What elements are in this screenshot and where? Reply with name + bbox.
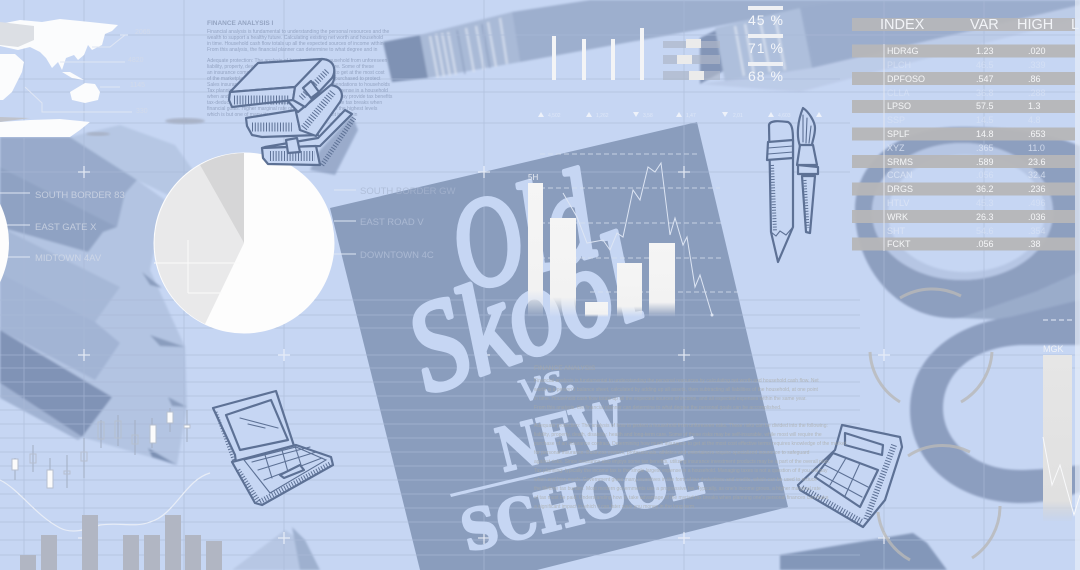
data table: LPSO: [887, 101, 911, 111]
candlestick chart: [12, 408, 190, 488]
photo: pencil top: [383, 0, 1080, 92]
percent stats: 71 %: [748, 40, 784, 56]
data table: [852, 17, 1080, 251]
bar chart bottom: [20, 515, 222, 570]
data table: HIGH: [1017, 17, 1053, 33]
data table: DRGS: [887, 184, 913, 194]
data table: 26.3: [976, 212, 994, 222]
ticker row: [538, 112, 822, 119]
heading: Old Skool vs New School lettering: NEW: [490, 387, 634, 487]
stacked horizontal bars: [663, 39, 720, 80]
percent stats: 68 %: [748, 68, 784, 84]
text block: finance analysis top: when and how the family can reduce taxes through tax law may provide tax benefits: [207, 94, 393, 100]
text block: finance analysis top: Sales insurance agents may make some of these recommendations to households: [207, 82, 390, 88]
bar chart center: 5H: [528, 173, 538, 182]
text block: finance analysis top: of the marketplace and insurance products, which can be purchased to protect: [207, 76, 381, 82]
data table: 11.0: [1028, 143, 1045, 153]
data table: 23.6: [1028, 157, 1046, 167]
world map: 2065: [135, 29, 151, 36]
text block: finance analysis center: worth is a person's balance sheet, calculated by adding up all assets, then subtracting all liabilities of the household, at one point: [534, 387, 819, 393]
data table: .86: [1028, 74, 1041, 84]
text block: finance analysis top: liability, property, death, disability, health and long-term care. Some of these: [207, 64, 374, 70]
data table: .354: [1028, 226, 1046, 236]
data table: 32.4: [1028, 170, 1046, 180]
left labels: [0, 190, 125, 264]
text block: finance analysis center: liability, property, death, disability, health and long-term care. Some of these risks may be self-insurable, while most will require the: [534, 432, 822, 438]
data table: .056: [976, 170, 994, 180]
data table: 1.23: [976, 46, 994, 56]
data table: FCKT: [887, 239, 911, 249]
pie chart: [154, 152, 334, 334]
text block: finance analysis center: purchase of an insurance contract. Determining how much insurance to get at the most cost effective terms requires knowledge of the market: [534, 441, 847, 447]
data table: SRMS: [887, 157, 913, 167]
data table: .589: [976, 157, 994, 167]
data table: SHT: [887, 226, 906, 236]
world map: 4820: [128, 57, 144, 64]
data table: VAR: [970, 17, 999, 33]
text block: finance analysis top: in time. Household cash flow totals up all the expected sources of income within: [207, 41, 384, 47]
text block: finance analysis top: an insurance company. Determining how much insurance to get at the most cost: [207, 70, 385, 76]
data table: WRK: [887, 212, 908, 222]
data table: HDR4G: [887, 46, 919, 56]
ticker row: 3,58: [643, 113, 653, 119]
text block: finance analysis center: when and how much. Government gives many incentives in the form of tax deductions and credits, which can be used to reduce: [534, 477, 817, 483]
icon: calculator: [798, 425, 902, 527]
world map: [0, 19, 205, 137]
data table: 36.8: [976, 88, 994, 98]
ticker row: 1,47: [686, 113, 696, 119]
data table: PLCH: [887, 60, 911, 70]
text block: finance analysis top: Adequate protection: The analysis of how to protect a household from unforeseen: [207, 58, 388, 64]
heading: Old Skool vs New School lettering: vs.: [512, 348, 581, 412]
text block: finance analysis center: in time. Household cash flow totals up all the expected sources of income, and all expected expenses within the same year.: [534, 396, 807, 402]
heading: Old Skool vs New School lettering: [389, 143, 709, 566]
right bar with sparkline: MGK: [1043, 344, 1064, 354]
heading: Old Skool vs New School lettering: Old: [435, 143, 611, 319]
text block: finance analysis top: From this analysis, the financial planner can determine to what degree and in: [207, 47, 378, 53]
data table: 45.3: [976, 198, 994, 208]
partial pie chart: [0, 153, 9, 333]
text block: finance analysis center: against risks. Since insurance also enjoys some tax benefits, utilizing insurance investment products may be a part of the overall plan.: [534, 459, 830, 465]
data table: XYZ: [887, 143, 905, 153]
crosshair markers: [78, 166, 890, 544]
data table: DPFOSO: [887, 74, 925, 84]
left labels: MIDTOWN 4AV: [35, 253, 102, 264]
photo: pencils on the left: [0, 125, 200, 465]
text block: finance analysis top: which is but one of many items that can make a significant impact in: [207, 112, 358, 118]
data table: 36.2: [976, 184, 994, 194]
bar chart center: [528, 173, 675, 317]
text block: finance analysis center: Financial analysis is fundamental to understanding the personal resources by calculating net worth and household cash flow. Net: [534, 378, 819, 384]
text block: finance analysis center: a significant impact in which it can later save you money in the long term.: [534, 504, 695, 510]
map callout lines: [25, 35, 132, 112]
pie labels right: DOWNTOWN 4C: [360, 250, 434, 261]
data table: .020: [1028, 46, 1046, 56]
world map: 1145: [130, 82, 145, 89]
ticker row: 2,01: [733, 113, 743, 119]
data table: .056: [976, 239, 994, 249]
line chart: [540, 154, 738, 316]
data table: 46.5: [976, 60, 994, 70]
pie labels right: SOUTH BORDER GW: [360, 186, 456, 197]
ticker row: 1,262: [596, 113, 609, 119]
data table: 14.8: [976, 129, 994, 139]
text block: finance analysis center: Adequate protection: The analysis of how to protect a household from unforeseen risks. These risks can be divided into the following:: [534, 423, 828, 429]
data table: SSP: [887, 115, 905, 125]
data table: 54.6: [976, 226, 994, 236]
pie labels right: [334, 186, 456, 261]
heading: Old Skool vs New School lettering: SCHOOL: [454, 442, 709, 566]
text block: finance analysis center: for personal insurance. Business owners, professionals, athletes and entertainers require specialized insurance to safeguard: [534, 450, 810, 456]
data table: 14.5: [976, 115, 994, 125]
text block: finance analysis center: FINANCE ANALYSIS: [534, 365, 596, 372]
left labels: SOUTH BORDER 83: [35, 190, 125, 201]
icon: laptop: [213, 391, 333, 505]
bar chart top: [552, 28, 644, 80]
percent stats: 45 %: [748, 12, 784, 28]
photo: scissors: [232, 127, 1080, 570]
data table: .38: [1028, 239, 1041, 249]
data table: .236: [1028, 184, 1046, 194]
icon: stack of books: [229, 59, 358, 175]
heading: Old Skool vs New School lettering: Skool: [389, 207, 658, 420]
ticker row: 4,502: [548, 113, 561, 119]
right bar with sparkline: [1043, 320, 1080, 521]
text block: finance analysis top: FINANCE ANALYSIS I: [207, 20, 274, 27]
data table: .288: [1028, 88, 1046, 98]
text block: finance analysis top: [207, 20, 393, 118]
data table: SPLF: [887, 129, 910, 139]
text block: finance analysis center: Tax planning: typically the income tax is the single largest expense in a household. Managing taxes is not a question of if you will pay: [534, 468, 828, 474]
data table: 4.8: [1028, 115, 1041, 125]
data table: .365: [976, 143, 994, 153]
text block: finance analysis center: From this analysis, the financial planner can determine to what degree the personal goals can be accomplished.: [534, 405, 781, 411]
panel: tilted dark card: [330, 122, 788, 570]
data table: .339: [1028, 60, 1046, 70]
data table: HTLV: [887, 198, 909, 208]
data table: .496: [1028, 198, 1046, 208]
data table: 1.3: [1028, 101, 1041, 111]
pie labels right: EAST ROAD V: [360, 217, 424, 228]
text block: finance analysis top: wealth to support a healthy future. Calculating existing net worth and household: [207, 35, 383, 41]
data table: .547: [976, 74, 994, 84]
left labels: EAST GATE X: [35, 222, 97, 233]
text block: finance analysis top: Tax planning: typically the income tax is the single largest expense in a household: [207, 88, 388, 94]
data table: 57.5: [976, 101, 994, 111]
data table: CLLA: [887, 88, 910, 98]
data table: .036: [1028, 212, 1046, 222]
text block: finance analysis top: tax-deductible. Understanding how to take advantage of these tax breaks when: [207, 100, 382, 106]
text block: finance analysis center: the lifetime tax burden. Most modern governments use a progressive tax. Typically, as one's income grows, a higher marginal rate: [534, 486, 821, 492]
ticker row: 4,603: [778, 113, 791, 119]
text block: finance analysis center: of tax must be paid. Understanding how to take advantage of the myriad tax breaks when planning one's personal finances can make: [534, 495, 829, 501]
gauge arcs: [870, 289, 1000, 560]
data table: CCAN: [887, 170, 913, 180]
curve line: [0, 473, 210, 531]
data table: .653: [1028, 129, 1046, 139]
world map: 330: [136, 108, 148, 115]
percent stats: [748, 6, 784, 84]
icon: pencil and paintbrush: [767, 108, 818, 262]
text block: finance analysis center: [534, 365, 847, 510]
text block: finance analysis top: financial goals. Higher marginal rate of tax must be paid on the highest levels: [207, 106, 378, 112]
right strip: [1075, 0, 1080, 570]
data table: INDEX: [880, 17, 925, 33]
text block: finance analysis top: Financial analysis is fundamental to understanding the personal resources and the: [207, 29, 390, 35]
